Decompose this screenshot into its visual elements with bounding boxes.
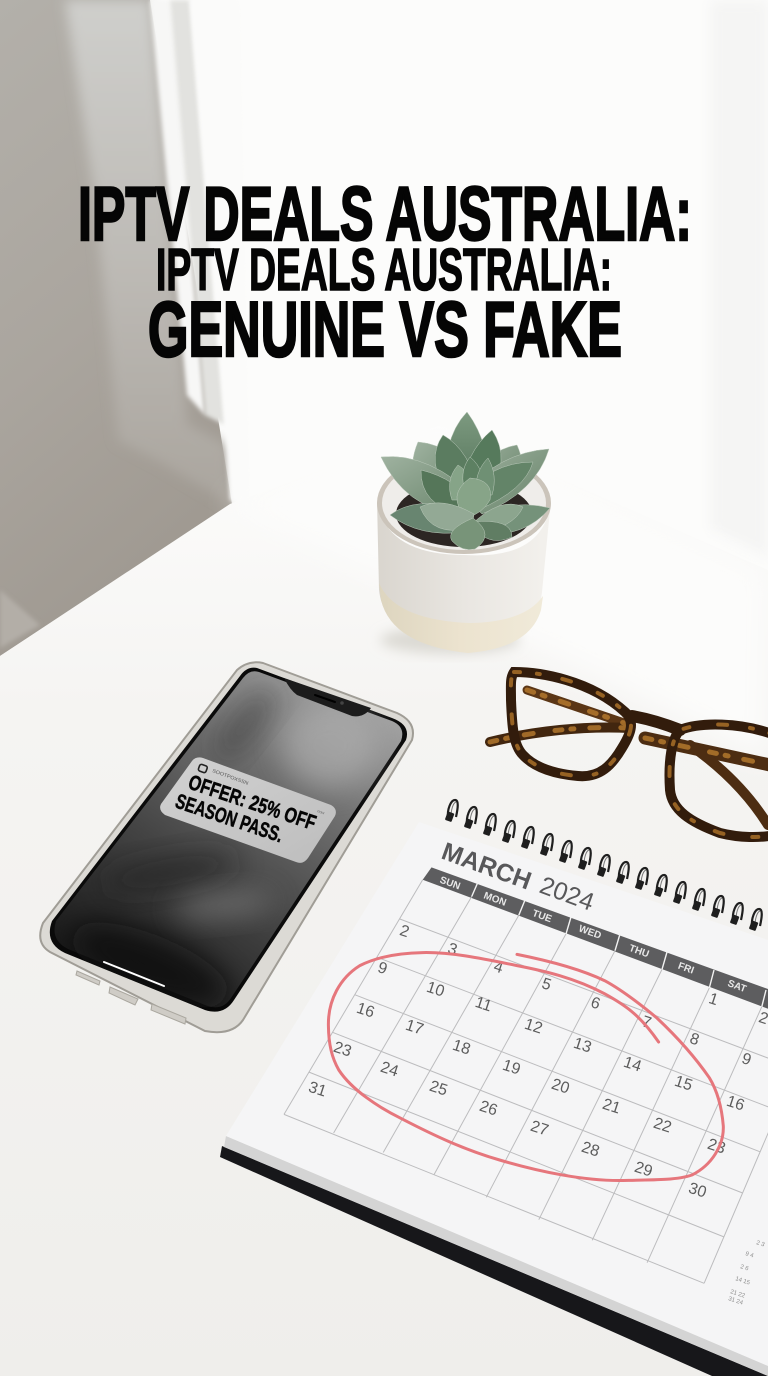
phone screen — [50, 668, 408, 1012]
calendar — [220, 800, 768, 1376]
date numbers: 5 — [540, 975, 553, 994]
weekday header band: SAT — [726, 978, 748, 995]
month heading: 2024 — [536, 871, 598, 917]
date numbers: 22 — [651, 1115, 674, 1137]
date numbers: 8 — [688, 1030, 701, 1049]
date numbers: 1 — [707, 990, 720, 1009]
window frame: bright window opening — [150, 0, 768, 560]
calendar page — [226, 822, 768, 1366]
case bottom cut-outs — [76, 971, 186, 1024]
weekday header band — [423, 867, 768, 1017]
weekday header band: MON — [482, 890, 508, 909]
right lens — [669, 725, 768, 837]
notification card: SOOTPOXSSN — [211, 768, 249, 787]
wall: grey shaded wall at left — [0, 0, 232, 656]
mini calendar: 31 24 — [727, 1296, 744, 1307]
succulent leaves — [381, 412, 550, 550]
red hand-drawn circle — [328, 953, 723, 1181]
month heading: MARCH — [438, 837, 535, 895]
date numbers: 24 — [378, 1059, 401, 1081]
date numbers: 12 — [522, 1016, 545, 1038]
app icon — [198, 764, 208, 773]
date numbers: 7 — [640, 1013, 653, 1032]
date numbers: 6 — [589, 994, 602, 1013]
date numbers: 11 — [473, 994, 494, 1015]
date numbers: 9 — [376, 959, 389, 978]
left lens — [511, 672, 631, 776]
mini calendar: 9 4 — [744, 1251, 755, 1260]
date numbers: 21 — [600, 1096, 623, 1118]
date numbers: 10 — [424, 979, 447, 1001]
date numbers: 20 — [549, 1076, 572, 1098]
home indicator — [104, 962, 164, 986]
weekday header band: THU — [627, 943, 650, 960]
weekday header band: FRI — [676, 961, 696, 977]
date numbers: 31 — [306, 1079, 329, 1101]
date numbers: 18 — [450, 1037, 473, 1059]
phone — [30, 650, 430, 1032]
date numbers: 4 — [492, 958, 505, 977]
date numbers — [306, 922, 768, 1202]
mini calendar — [727, 1240, 766, 1307]
notification card: OFFER: 25% OFF — [185, 771, 319, 835]
pot base glaze — [379, 583, 543, 653]
pot body — [377, 500, 551, 653]
date numbers: 15 — [672, 1073, 695, 1095]
date numbers: 25 — [427, 1078, 450, 1100]
date numbers: 28 — [579, 1139, 602, 1161]
date numbers: 9 — [740, 1050, 753, 1069]
weekday header band: TUE — [531, 908, 553, 925]
notification card — [160, 757, 336, 863]
bridge — [632, 716, 680, 730]
date numbers: 30 — [686, 1180, 709, 1202]
calendar backing board — [220, 1146, 768, 1376]
desk: white table top — [0, 425, 768, 1376]
date numbers: 26 — [477, 1098, 500, 1120]
temple arms — [490, 690, 768, 825]
month heading — [438, 837, 598, 917]
date numbers: 16 — [354, 1000, 377, 1022]
date numbers: 27 — [528, 1118, 551, 1140]
date numbers: 23 — [331, 1039, 354, 1061]
page stack edge — [224, 1136, 768, 1376]
pot rim and soil — [377, 452, 551, 554]
plant in ceramic pot — [377, 412, 551, 654]
date numbers: 16 — [724, 1093, 747, 1115]
date numbers: 29 — [632, 1159, 655, 1181]
clear phone case — [40, 662, 413, 1032]
date numbers: 3 — [446, 940, 459, 959]
weekday header band: WED — [577, 923, 603, 942]
notification card: now — [317, 808, 325, 815]
date numbers: 13 — [571, 1035, 594, 1057]
mini calendar: 21 22 — [729, 1289, 746, 1300]
mini calendar: 2 6 — [739, 1264, 750, 1273]
notch with speaker — [284, 678, 371, 716]
date numbers: 19 — [500, 1057, 523, 1079]
date numbers: 23 — [705, 1136, 728, 1158]
date numbers: 14 — [621, 1054, 644, 1076]
weekday header band: SUN — [438, 875, 462, 892]
title — [78, 172, 692, 373]
mini calendar: 2 3 — [755, 1240, 766, 1249]
glasses: tortoiseshell frames — [490, 672, 768, 837]
date numbers: 2 — [398, 922, 411, 941]
date grid — [284, 880, 768, 1283]
spiral binding — [445, 800, 762, 931]
mini calendar: 14 15 — [734, 1276, 751, 1287]
date numbers: 17 — [403, 1017, 426, 1039]
notification card: SEASON PASS. — [172, 790, 286, 847]
